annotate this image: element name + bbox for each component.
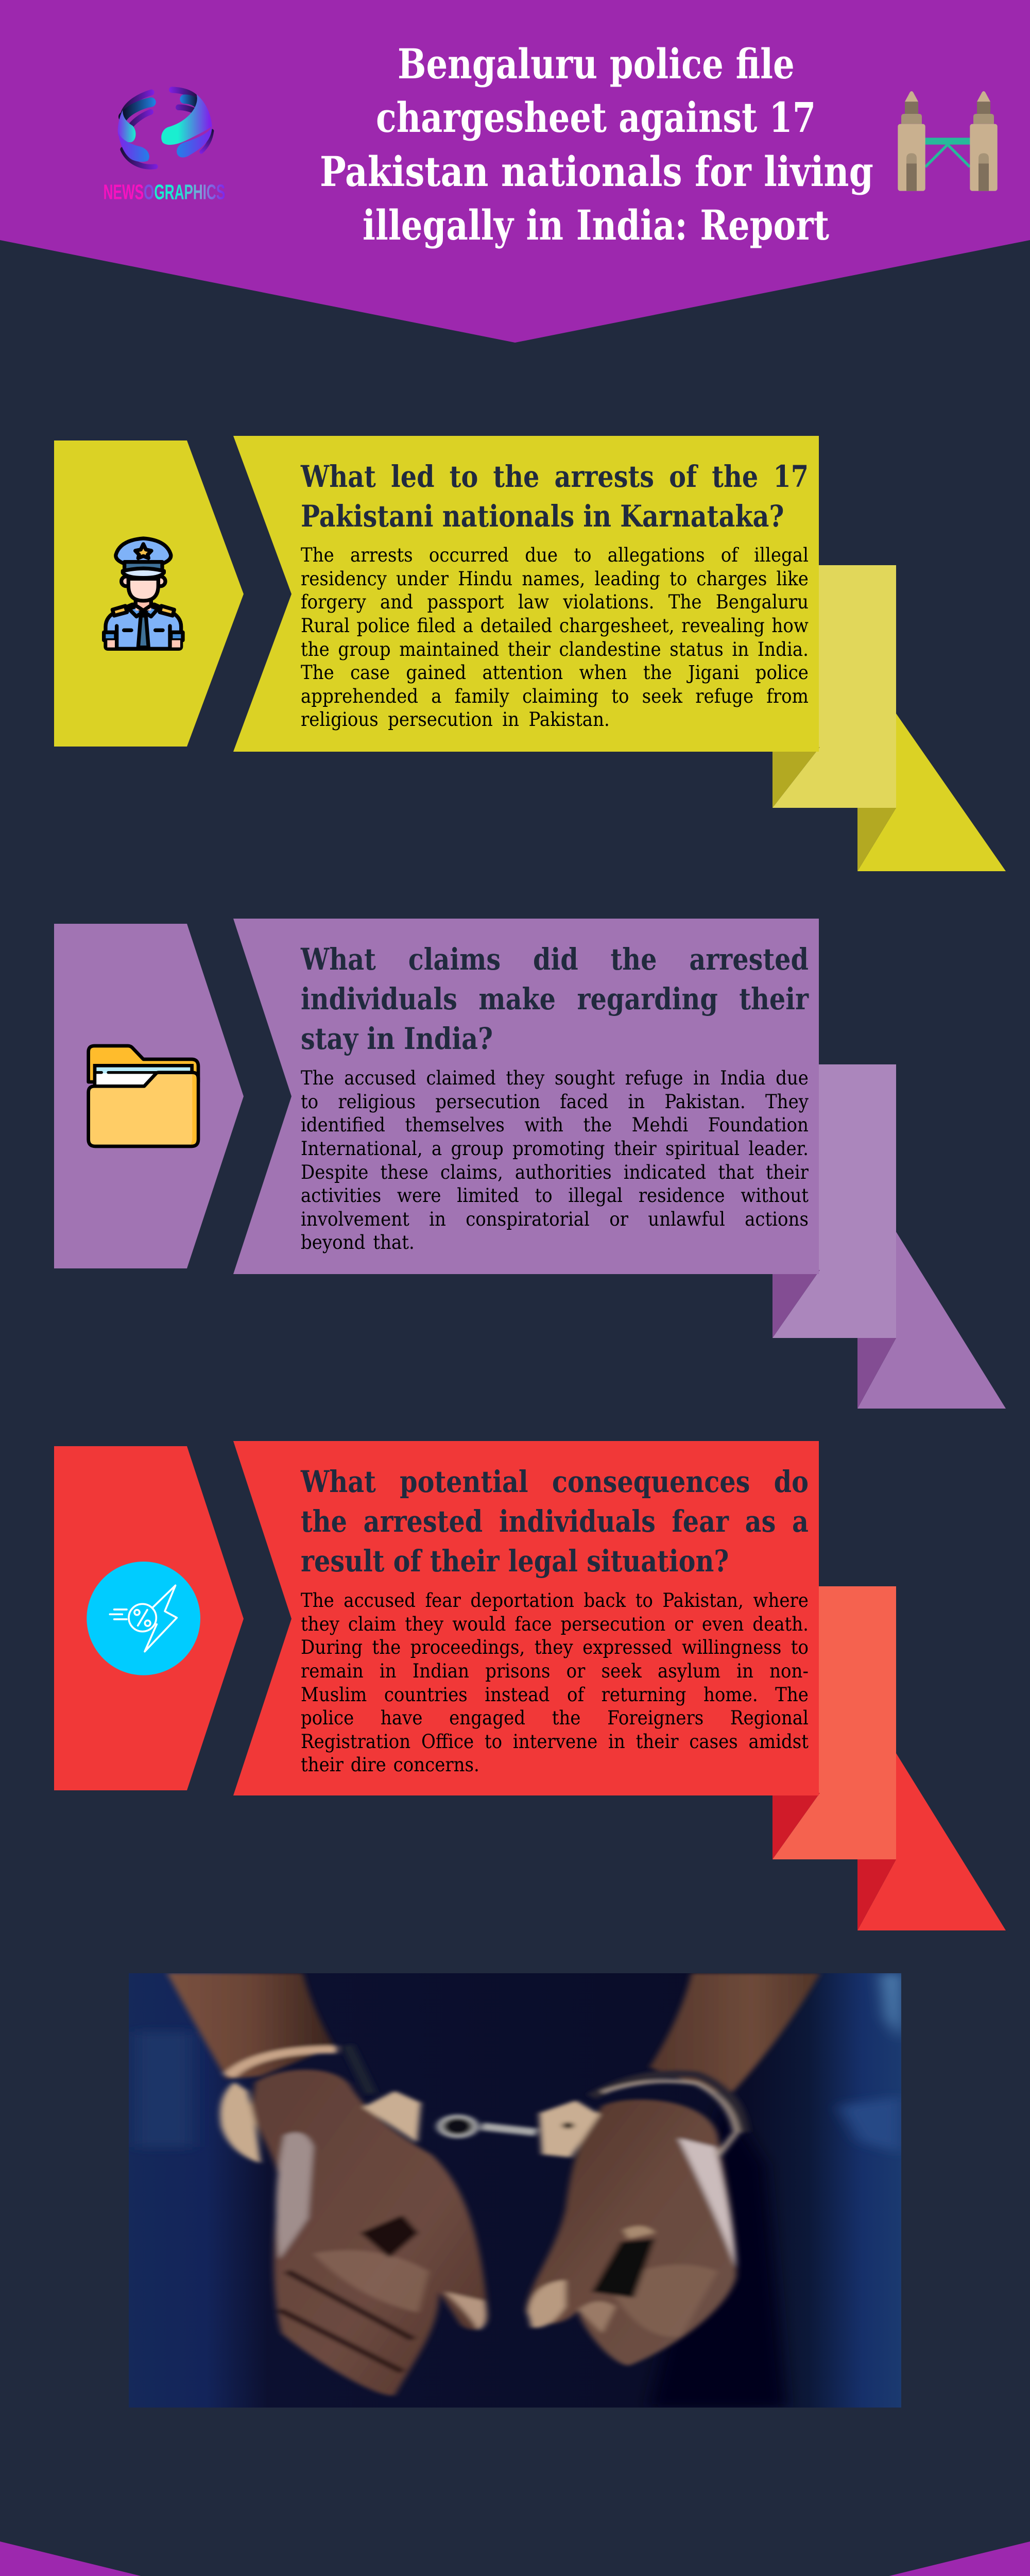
text block: police have engaged the Foreigners Regional [301, 1707, 809, 1729]
text block: identified themselves with the Mehdi Foundation [301, 1114, 809, 1136]
text block: their dire concerns. [301, 1754, 479, 1776]
text block: The accused claimed they sought refuge in India due [301, 1067, 809, 1089]
text block: the group maintained their clandestine status in India. [301, 638, 809, 660]
heading: result of their legal situation? [301, 1544, 729, 1579]
icon: percent lightning [87, 1562, 200, 1675]
heading: individuals make regarding their [301, 981, 809, 1016]
text block: involvement in conspiratorial or unlawful actions [301, 1208, 809, 1230]
heading: stay in India? [301, 1021, 493, 1056]
icon: folder [87, 1044, 200, 1148]
text block: The accused fear deportation back to Pakistan, where [301, 1589, 809, 1612]
ribbon shapes purple [54, 919, 1006, 1409]
text block: International, a group promoting their spiritual leader. [301, 1138, 809, 1160]
header banner [0, 0, 1030, 343]
footer banner [0, 2541, 1030, 2576]
logo: Newsographics header [104, 87, 225, 204]
title [320, 40, 873, 249]
text block: religious persecution in Pakistan. [301, 708, 610, 731]
text block: activities were limited to illegal residence without [301, 1184, 809, 1207]
text block: forgery and passport law violations. The Bengaluru [301, 591, 809, 613]
text block: Muslim countries instead of returning home. The [301, 1684, 809, 1706]
text block [301, 1589, 809, 1777]
text block: to religious persecution faced in Pakistan. They [301, 1091, 809, 1113]
title: Bengaluru police file [398, 40, 795, 88]
title: illegally in India: Report [363, 201, 829, 249]
text block: apprehended a family claiming to seek refuge from [301, 685, 809, 707]
text block: The case gained attention when the Jigani police [301, 662, 809, 684]
text block: During the proceedings, they expressed willingness to [301, 1636, 809, 1658]
text block [301, 1067, 809, 1253]
text block: they claim they would face persecution or even death. [301, 1613, 809, 1635]
icon: police officer [102, 536, 185, 651]
text block: Registration Office to intervene in their cases amidst [301, 1731, 809, 1753]
ribbon shapes red [54, 1441, 1006, 1930]
title: Pakistan nationals for living [320, 147, 873, 196]
panel: question 2 [54, 919, 1006, 1409]
text block: Rural police filed a detailed chargesheet, revealing how [301, 615, 809, 637]
heading [301, 1464, 809, 1579]
icon: twin towers [898, 91, 998, 191]
ribbon shapes yellow [54, 436, 1006, 871]
heading: the arrested individuals fear as a [301, 1504, 809, 1539]
heading [301, 459, 809, 534]
heading: What led to the arrests of the 17 [301, 459, 809, 494]
text block [301, 544, 809, 731]
heading: What potential consequences do [301, 1464, 809, 1499]
text block: The arrests occurred due to allegations of illegal [301, 544, 809, 566]
photo: handcuffed hands [129, 1973, 901, 2408]
panel: question 3 [54, 1441, 1006, 1930]
heading: Pakistani nationals in Karnataka? [301, 499, 784, 534]
heading [301, 942, 809, 1056]
panel: question 1 [54, 436, 1006, 871]
text block: residency under Hindu names, leading to charges like [301, 568, 809, 590]
text block: Despite these claims, authorities indicated that their [301, 1161, 809, 1183]
title: chargesheet against 17 [376, 93, 816, 142]
heading: What claims did the arrested [301, 942, 809, 977]
text block: beyond that. [301, 1231, 415, 1253]
text block: remain in Indian prisons or seek asylum in non- [301, 1660, 809, 1682]
